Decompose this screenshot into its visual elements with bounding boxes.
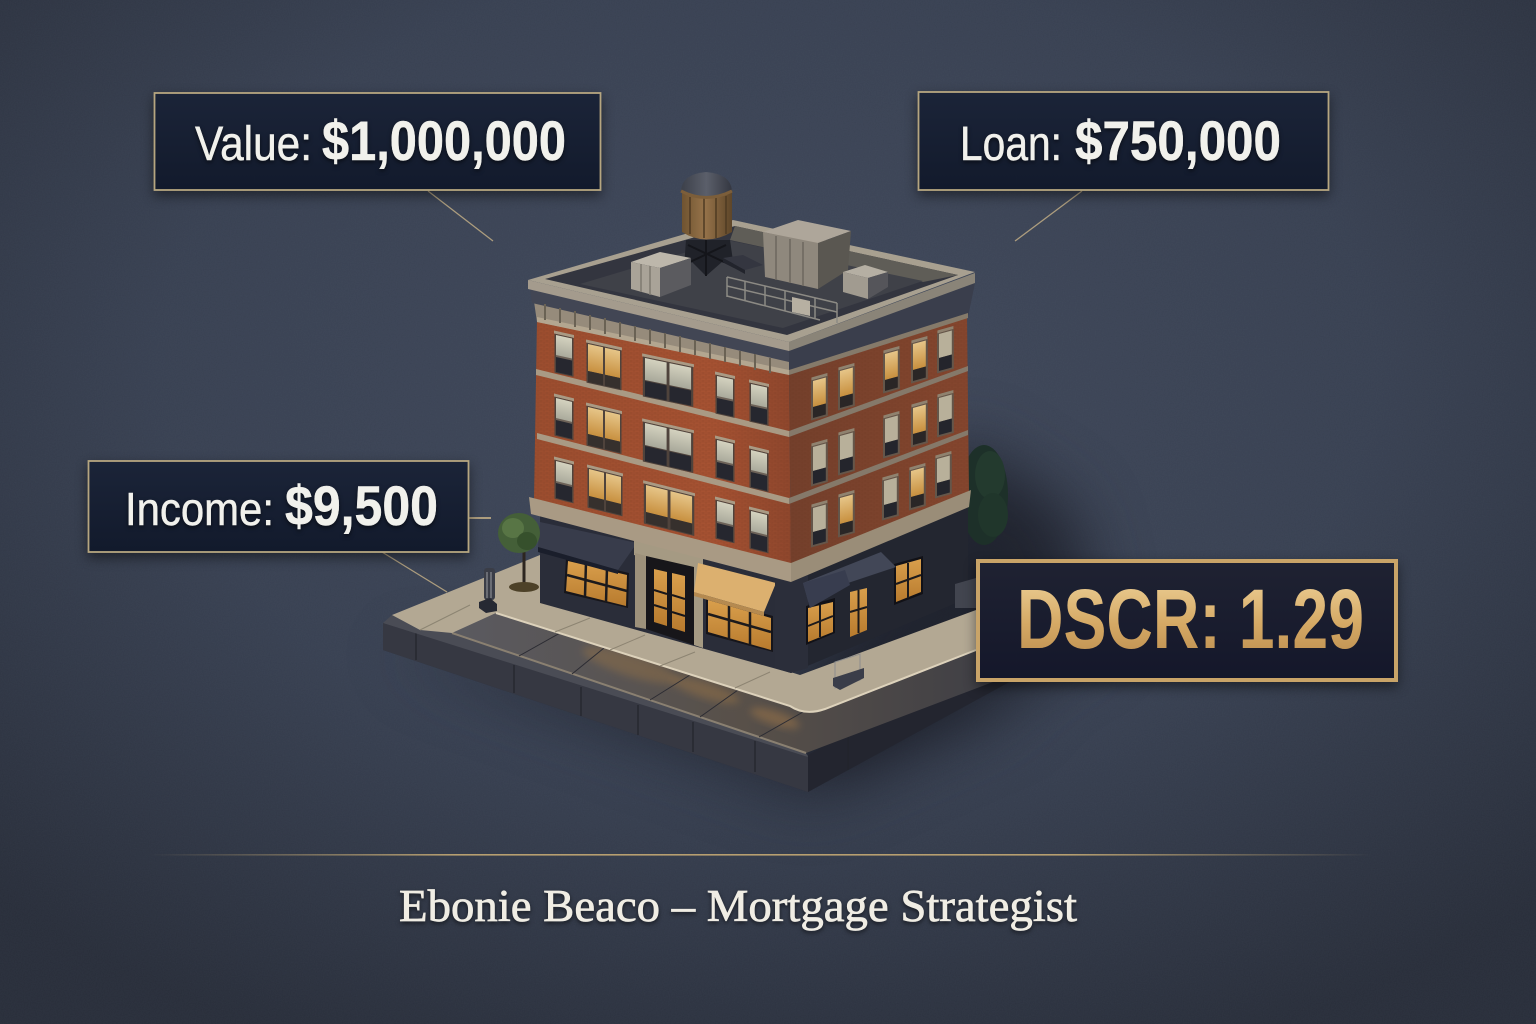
footer divider (150, 854, 1372, 856)
callout: value: Value: (195, 118, 312, 171)
callout: loan: Loan: (960, 118, 1062, 171)
rooftop platform (723, 255, 763, 274)
right shop window (706, 598, 773, 652)
street lamp post (479, 568, 497, 613)
right face far window (894, 556, 923, 605)
storefront right face (775, 503, 968, 673)
tree behind building (960, 445, 1008, 545)
water tower (681, 172, 734, 276)
stone floor belts (529, 366, 971, 582)
ground shadow (385, 440, 1100, 800)
rooftop HVAC unit left (631, 252, 691, 297)
right face door (850, 588, 867, 637)
callout: loan (918, 92, 1328, 190)
right face windows (811, 326, 954, 548)
cornice (528, 273, 975, 375)
footer attribution: Ebonie Beaco – Mortgage Strategist (399, 881, 1078, 931)
left face windows (554, 331, 769, 554)
callout: income: $9,500 (285, 474, 438, 537)
large rooftop utility box (763, 220, 851, 289)
callout: value (154, 93, 600, 190)
callout: DSCR result (978, 561, 1396, 680)
sidewalk (392, 555, 976, 712)
brick walls (534, 315, 969, 570)
tan awning (694, 563, 776, 616)
callout: income (88, 461, 468, 552)
rooftop railing (727, 277, 837, 323)
callout: DSCR result: DSCR: 1.29 (1017, 572, 1364, 666)
callout: income: Income: (125, 483, 274, 535)
sidewalk tree (498, 513, 540, 592)
roof (528, 220, 975, 342)
isometric apartment building illustration (383, 172, 1035, 792)
storefront left face (538, 510, 791, 673)
right face left window (806, 598, 835, 645)
street platform base (383, 615, 1035, 792)
rooftop HVAC unit right (843, 265, 888, 299)
trash bin (955, 578, 976, 608)
connector lines (382, 191, 1082, 592)
left shop window (564, 558, 629, 608)
sidewalk planter stand (833, 654, 864, 690)
navy corner awning (803, 552, 896, 608)
road strip with curb (452, 613, 1030, 753)
dark awning (538, 522, 637, 574)
callout: loan: $750,000 (1075, 109, 1281, 172)
callout: value: $1,000,000 (322, 109, 566, 172)
entry door with stone surround (634, 540, 703, 648)
